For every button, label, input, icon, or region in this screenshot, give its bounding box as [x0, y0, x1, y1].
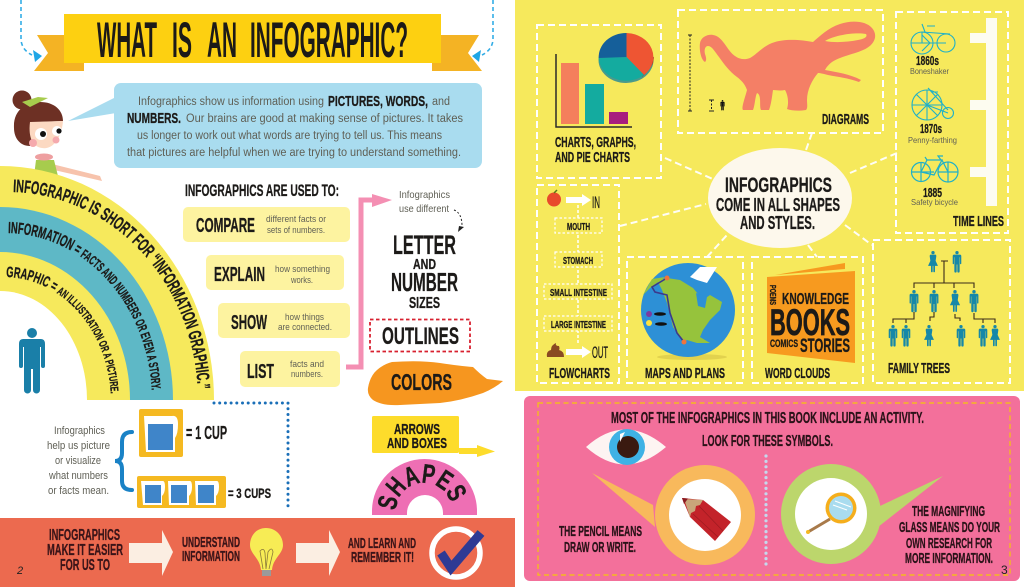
- intro speech bubble: [68, 83, 482, 168]
- icon: light bulb: [250, 528, 283, 576]
- band text 2: INFORMATION: [182, 549, 240, 565]
- outlines box: OUTLINES: [382, 323, 459, 350]
- icon: tiny person: [720, 100, 725, 110]
- icon: boneshaker: [911, 24, 955, 54]
- intro speech bubble: that pictures are helpful when we are trying to understand something.: [127, 147, 461, 159]
- rainbow: [0, 166, 214, 400]
- text: letter and number sizes: [391, 230, 458, 312]
- icon: magnifying glass: [806, 492, 856, 534]
- maps label: MAPS AND PLANS: [645, 365, 725, 382]
- band text 3: REMEMBER IT!: [351, 550, 414, 566]
- label 1870s: [908, 121, 957, 145]
- icon: book: [767, 263, 855, 363]
- arrow: small dashed black: [454, 210, 464, 232]
- title text: WHAT: [97, 12, 157, 68]
- title text: [97, 12, 408, 68]
- flow steps: SMALL INTESTINE: [550, 288, 607, 299]
- center ellipse: AND STYLES.: [740, 213, 815, 233]
- center ellipse: INFOGRAPHICS: [725, 174, 832, 197]
- dotted divider: [764, 456, 768, 565]
- text: letter and number sizes: SIZES: [409, 295, 440, 312]
- bottom orange band: [0, 518, 515, 587]
- center ellipse: [708, 148, 852, 248]
- panel: family trees: [873, 240, 1010, 383]
- flow steps: STOMACH: [563, 256, 593, 267]
- icon: eye: [586, 429, 666, 465]
- icon: book: KNOWLEDGE: [782, 291, 849, 308]
- intro speech bubble: us longer to work out what words are trying to tell us. This means: [137, 130, 442, 142]
- timeline bar: [970, 18, 997, 206]
- pencil caption: DRAW OR WRITE.: [564, 539, 636, 556]
- label 1885: 1885: [923, 185, 942, 200]
- colors brush stroke: COLORS: [391, 369, 452, 395]
- icon: poop: [547, 343, 564, 357]
- one cup: = 1 CUP: [186, 423, 227, 443]
- card: compare: sets of numbers.: [267, 225, 325, 236]
- card: explain: works.: [290, 275, 313, 286]
- chart label: AND PIE CHARTS: [555, 149, 630, 166]
- outlines box: [370, 320, 470, 352]
- label 1870s: Penny-farthing: [908, 135, 957, 145]
- rainbow text: outer band: INFOGRAPHIC IS SHORT FOR “INFORMATION GRAPHIC.”: [14, 180, 210, 388]
- panel: diagrams: [678, 10, 883, 133]
- page number 2: 2: [16, 565, 23, 577]
- icon: dashed blue arrow left: [21, 0, 42, 62]
- text: picture or visualize: or facts mean.: [48, 485, 109, 497]
- three cups: = 3 CUPS: [228, 485, 271, 501]
- label 1885: [911, 185, 958, 207]
- label 1885: Safety bicycle: [911, 197, 958, 207]
- flow steps: LARGE INTESTINE: [551, 320, 606, 331]
- panel: flowcharts: IN: [592, 193, 600, 212]
- icon: apple: [547, 190, 561, 206]
- icon: book: BOOKS: [770, 302, 850, 343]
- card: list: [240, 351, 340, 387]
- chart label: [555, 134, 636, 166]
- activity heading: [611, 410, 924, 450]
- magnifying glass bubble: [781, 464, 943, 564]
- magnifying glass caption: [899, 503, 1000, 567]
- flow steps: MOUTH: [567, 222, 590, 233]
- three cups: [137, 476, 271, 508]
- pie chart: [598, 33, 654, 83]
- icon: check mark: [432, 529, 481, 577]
- heading: infographics are used to: INFOGRAPHICS ARE USED TO:: [185, 182, 339, 200]
- shapes arch: SHAPES: [378, 464, 466, 510]
- text: infographics use different: [399, 189, 450, 215]
- card: show: are connected.: [278, 322, 332, 333]
- panel: flowcharts: [537, 185, 619, 383]
- label 1860s: Boneshaker: [910, 66, 949, 76]
- band text 3: AND LEARN AND: [348, 536, 416, 552]
- word clouds label: WORD CLOUDS: [765, 365, 830, 382]
- family figures: [889, 251, 1000, 347]
- card: show: SHOW: [231, 312, 267, 334]
- title text: AN: [207, 12, 237, 68]
- text: picture or visualize: help us picture: [47, 440, 110, 452]
- title text: IS: [172, 12, 192, 68]
- dotted blue line: [214, 403, 288, 508]
- arrows and boxes: AND BOXES: [387, 435, 447, 452]
- label 1860s: [910, 53, 949, 76]
- label 1870s: 1870s: [920, 121, 942, 136]
- text: picture or visualize: what numbers: [48, 470, 108, 482]
- chart label: CHARTS, GRAPHS,: [555, 134, 636, 151]
- band text 1: INFOGRAPHICS: [49, 527, 120, 544]
- title banner: INFOGRAPHIC?: [250, 12, 408, 68]
- band text 2: UNDERSTAND: [182, 535, 240, 551]
- icon: book: COMICS: [770, 338, 798, 350]
- text: infographics use different: Infographics: [399, 189, 450, 201]
- card: explain: [206, 255, 344, 290]
- text: letter and number sizes: LETTER: [393, 230, 456, 260]
- arrow out: [566, 346, 591, 358]
- icon: globe: [641, 263, 735, 360]
- page number 3: 3: [1001, 563, 1008, 577]
- arrow: pink connector: [346, 194, 392, 367]
- label 1860s: 1860s: [916, 53, 939, 68]
- card: list: LIST: [247, 361, 274, 383]
- text: letter and number sizes: AND: [413, 256, 436, 273]
- colors brush stroke: [368, 361, 503, 405]
- family trees label: FAMILY TREES: [888, 360, 950, 377]
- pencil caption: [559, 523, 642, 556]
- icon: blue person: [19, 328, 45, 393]
- panel: activity symbols: [524, 396, 1020, 581]
- card: explain: EXPLAIN: [214, 264, 265, 286]
- activity heading: LOOK FOR THESE SYMBOLS.: [702, 433, 833, 450]
- page background: right yellow page: [515, 0, 1024, 391]
- card: show: how things: [285, 312, 324, 323]
- text: letter and number sizes: NUMBER: [391, 267, 458, 297]
- band text 1: MAKE IT EASIER: [47, 542, 123, 559]
- card: explain: how something: [275, 264, 330, 275]
- intro speech bubble: and: [432, 96, 450, 108]
- band text 2: [182, 535, 240, 565]
- title banner: [34, 12, 482, 71]
- arrow 1: [129, 530, 173, 576]
- intro speech bubble: Infographics show us information using: [138, 96, 324, 108]
- band text 1: FOR US TO: [60, 557, 110, 574]
- rainbow text: inner band: GRAPHIC = AN ILLUSTRATION OR A PICTURE.: [6, 266, 119, 394]
- card: list: facts and: [290, 359, 324, 370]
- text: picture or visualize: [47, 425, 110, 497]
- card: compare: COMPARE: [196, 215, 255, 237]
- card: show: [218, 303, 350, 338]
- icon: book: POEMS: [768, 285, 777, 305]
- pencil caption: THE PENCIL MEANS: [559, 523, 642, 540]
- scale marks: [688, 35, 714, 111]
- bar chart: [556, 54, 632, 127]
- card: compare: [183, 207, 350, 242]
- pencil bubble: [592, 465, 755, 565]
- band text 1: [47, 527, 123, 574]
- arrows and boxes: [372, 416, 495, 457]
- arrow in: [566, 194, 591, 206]
- one cup: [139, 409, 227, 457]
- panel: time lines: [896, 12, 1008, 233]
- icon: dashed blue arrow right: [472, 0, 493, 62]
- flowcharts label: FLOWCHARTS: [549, 365, 610, 382]
- text: picture or visualize: Infographics: [54, 425, 105, 437]
- band text 3: [348, 536, 416, 566]
- card: compare: different facts or: [266, 214, 326, 225]
- panel: maps: [627, 257, 743, 383]
- card: list: numbers.: [291, 369, 323, 380]
- center ellipse: COME IN ALL SHAPES: [716, 195, 840, 215]
- icon: dinosaur: [700, 22, 875, 111]
- panel: word clouds: [752, 257, 863, 383]
- rainbow text: middle band: INFORMATION = FACTS AND NUMBERS OR EVEN A STORY.: [8, 222, 161, 390]
- arrows and boxes: ARROWS: [394, 421, 440, 438]
- text: picture or visualize: or visualize: [55, 455, 101, 467]
- intro speech bubble: Our brains are good at making sense of pictures. It takes: [186, 113, 463, 125]
- dashed connectors: [620, 133, 897, 257]
- icon: pencil: [682, 498, 731, 541]
- icon: penny-farthing: [912, 88, 954, 120]
- arrow 2: [296, 530, 340, 576]
- icon: book: STORIES: [800, 336, 850, 357]
- flow steps: [544, 218, 612, 331]
- panel: charts: [537, 25, 661, 178]
- intro speech bubble: NUMBERS.: [127, 110, 181, 127]
- intro speech bubble: PICTURES, WORDS,: [328, 93, 428, 110]
- blue brace: [115, 432, 132, 490]
- diagrams label: DIAGRAMS: [822, 111, 869, 128]
- icon: safety bicycle: [912, 156, 958, 182]
- girl illustration: [12, 90, 102, 181]
- tree lines: [893, 261, 995, 323]
- panel: flowcharts: OUT: [592, 343, 608, 362]
- text: infographics use different: use different: [399, 203, 449, 215]
